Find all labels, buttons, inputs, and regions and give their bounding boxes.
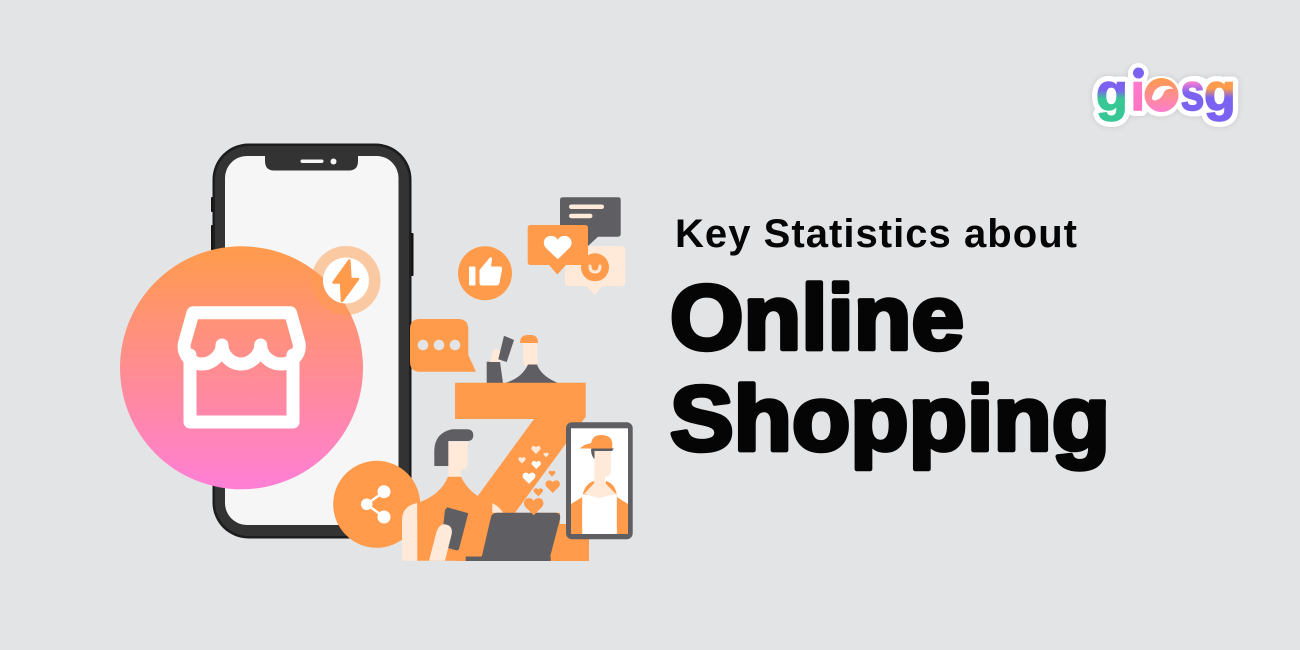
logo: giosg: g [1204, 64, 1236, 122]
logo: giosg: giosg [1096, 64, 1236, 122]
icon: heart bubble [528, 225, 588, 274]
icon: gradient store circle [120, 246, 363, 489]
icon: cream smile bubble [565, 246, 625, 295]
logo: giosg: g [1096, 64, 1128, 122]
icon: dark chat bubble [560, 197, 621, 246]
icon: typing bubble [410, 319, 476, 372]
hearts [518, 446, 560, 515]
heading: online: Online [670, 267, 964, 369]
number seven shape [455, 383, 589, 561]
smartphone [211, 144, 414, 538]
heading: shopping: Shopping [670, 368, 1110, 470]
figure: person with phone and laptop [402, 429, 560, 561]
icon: lightning badge [312, 246, 380, 315]
heading: key statistics: Key Statistics about [675, 212, 1077, 256]
figure: person holding phone [487, 335, 558, 383]
icon: share circle [333, 461, 420, 548]
logo: giosg: ı [1130, 64, 1145, 122]
tablet with portrait [566, 422, 633, 539]
icon: thumbs up circle [458, 246, 512, 300]
logo: giosg: s [1180, 64, 1204, 122]
